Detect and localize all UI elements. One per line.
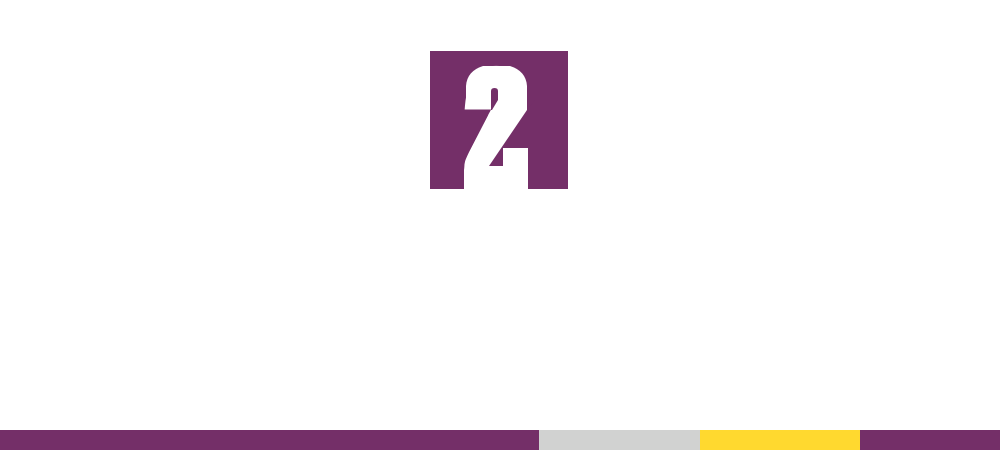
number badge [430, 51, 568, 189]
number 2: 2 [465, 37, 528, 230]
colour bar footer [0, 430, 1000, 450]
